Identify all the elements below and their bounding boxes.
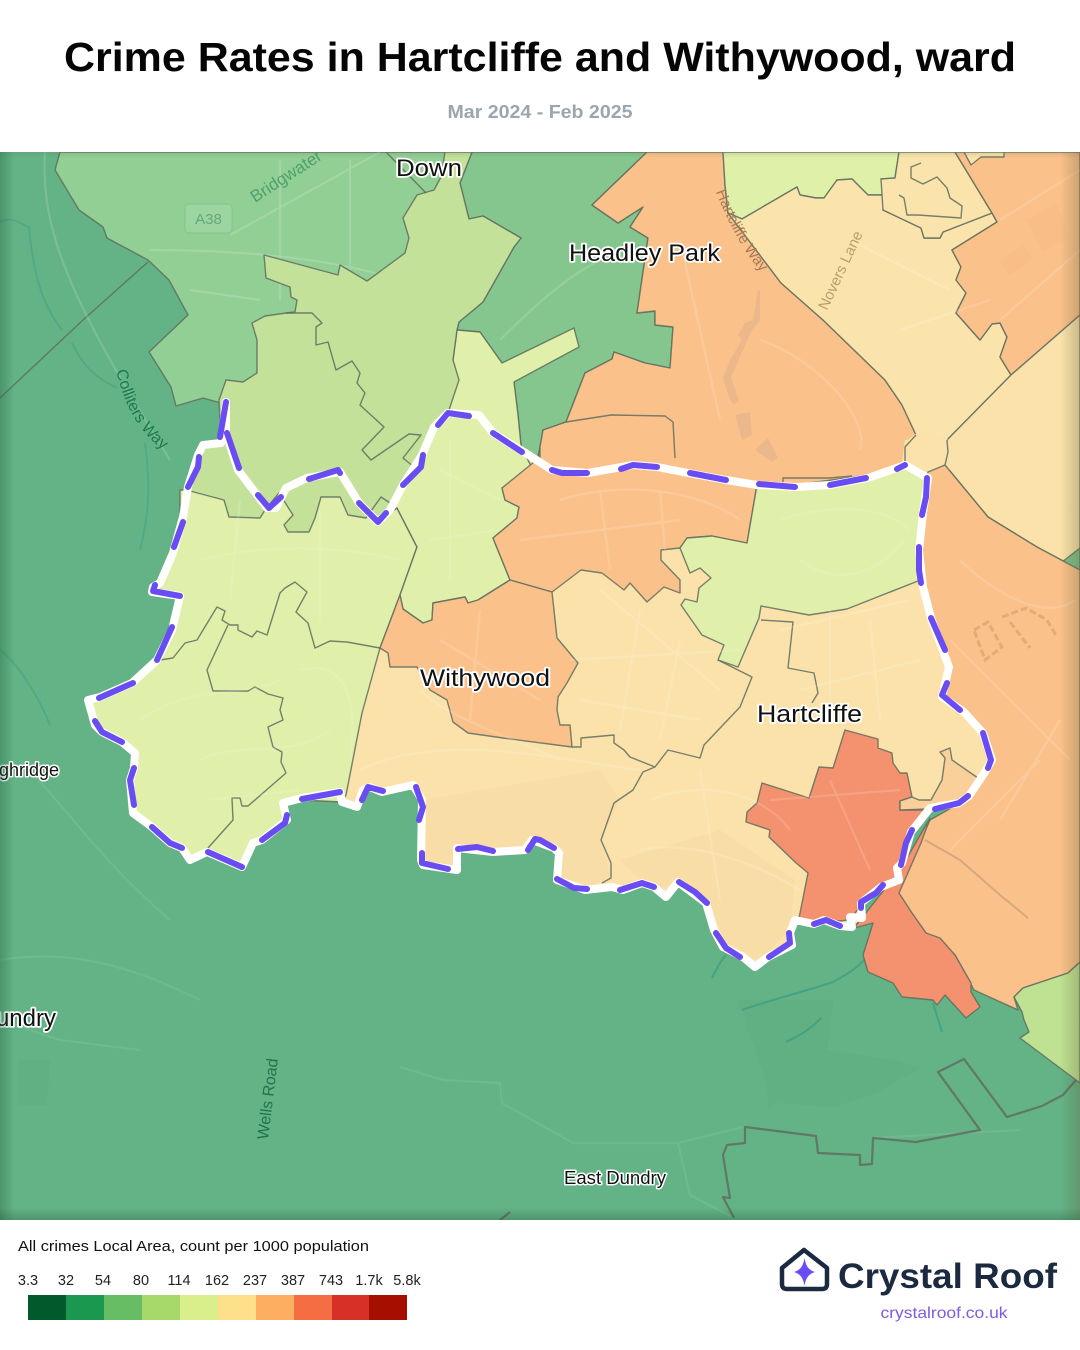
area: south-east light green bbox=[1014, 962, 1080, 1083]
faint rural roads bbox=[0, 760, 1020, 1218]
legend scale values: 32 bbox=[58, 1273, 74, 1289]
line: light green inner boundary bbox=[286, 313, 421, 467]
legend scale values: 54 bbox=[95, 1273, 111, 1289]
area: Headley Park green bbox=[457, 152, 673, 470]
logo wordmark: Crystal Roof bbox=[838, 1257, 1057, 1296]
area: south outer boundaries bbox=[500, 1059, 1076, 1220]
road label: Bridgwater: Bridgwater bbox=[247, 146, 326, 206]
line: north orange inner boundary bbox=[566, 415, 675, 458]
place label: Highridge fragment: ghridge bbox=[0, 760, 59, 780]
area: Novers Lane pale yellow bbox=[728, 179, 1011, 440]
area: Hartcliffe salmon bbox=[746, 730, 930, 923]
line: lime notch above ward bbox=[783, 476, 852, 485]
legend scale values: 237 bbox=[243, 1273, 267, 1289]
legend scale values: 3.3 bbox=[18, 1273, 38, 1289]
area: light green backing along ward bbox=[372, 497, 389, 516]
place label: Withywood: Withywood bbox=[420, 665, 550, 692]
map edge shading bbox=[0, 152, 1080, 1220]
place label: East Dundry: East Dundry bbox=[564, 1168, 666, 1188]
area: north-east orange bbox=[952, 152, 1080, 375]
area: ward base pale yellow bbox=[345, 459, 988, 962]
area: south ward shading bbox=[424, 770, 620, 885]
line: roundabout edges bbox=[904, 434, 949, 466]
streams: west bbox=[0, 220, 148, 725]
road label: Wells Road: Wells Road bbox=[255, 1058, 282, 1140]
streets: residential network bbox=[140, 170, 1080, 900]
icon: house with star bbox=[782, 1250, 827, 1289]
legend title: All crimes Local Area, count per 1000 population bbox=[18, 1239, 369, 1255]
road label: Colliters Way: Colliters Way bbox=[117, 370, 168, 449]
feature: ponds and stream bbox=[723, 290, 778, 462]
line: pocket inner boundary bbox=[899, 163, 962, 218]
choropleth map bbox=[0, 152, 1080, 1220]
legend bbox=[18, 1239, 421, 1320]
area: north orange bbox=[540, 152, 916, 490]
road shield: A38 bbox=[185, 204, 232, 233]
area: north pale lime bbox=[723, 152, 899, 219]
streams: south bbox=[712, 955, 942, 1042]
area: pocket pale yellow bbox=[881, 152, 992, 238]
legend scale values: 5.8k bbox=[393, 1273, 421, 1289]
area: central north lime bbox=[390, 413, 534, 623]
logo: Crystal Roof bbox=[782, 1250, 1057, 1322]
feature: east housing roads bbox=[974, 608, 1057, 660]
legend scale values: 387 bbox=[281, 1273, 305, 1289]
legend scale values: 80 bbox=[133, 1273, 149, 1289]
road shield: A38: A38 bbox=[195, 211, 222, 228]
area: south ward shading east bbox=[620, 830, 795, 960]
area: small green corner bbox=[1063, 548, 1080, 569]
area: small top pale shape bbox=[964, 152, 1004, 165]
ward boundary: white line bbox=[88, 402, 992, 967]
place label: Headley Park: Headley Park bbox=[569, 240, 721, 267]
legend scale values bbox=[18, 1273, 421, 1289]
area: light green north-centre bbox=[190, 152, 521, 532]
place label: Down: Down bbox=[396, 155, 462, 182]
area: roundabout bbox=[903, 434, 932, 453]
line: boundary north of Down bbox=[386, 152, 426, 193]
area: ward west lime bbox=[88, 470, 417, 867]
area: central orange bbox=[493, 462, 757, 602]
road: A38 bbox=[44, 152, 380, 460]
road label: Hartcliffe Way: Hartcliffe Way bbox=[716, 189, 768, 270]
woodland patches bbox=[18, 1000, 920, 1108]
area: east pale yellow triangle bbox=[945, 315, 1080, 570]
road label: Novers Lane: Novers Lane bbox=[815, 228, 867, 313]
subtitle: date range: Mar 2024 - Feb 2025 bbox=[448, 102, 632, 122]
legend scale values: 1.7k bbox=[355, 1273, 383, 1289]
area: east orange bbox=[897, 465, 1080, 1010]
patches: north-east orange shading bbox=[1000, 203, 1070, 275]
legend scale values: 114 bbox=[167, 1273, 191, 1289]
area: junction backing bbox=[902, 438, 950, 470]
area: small orange patch by east boundary bbox=[900, 748, 978, 810]
area: pale lime spur north of ward bbox=[448, 328, 579, 455]
area: south-east salmon bbox=[854, 818, 980, 1018]
legend scale values: 162 bbox=[205, 1273, 229, 1289]
area: medium green north-west bbox=[55, 152, 480, 406]
website link: crystalroof.co.uk bbox=[880, 1305, 1009, 1322]
place label: Hartcliffe: Hartcliffe bbox=[757, 701, 862, 728]
legend colour swatches bbox=[28, 1295, 407, 1320]
title: Crime Rates in Hartcliffe and Withywood, ward bbox=[64, 34, 1016, 80]
area: central-east lime bbox=[680, 465, 928, 667]
area: Withywood orange bbox=[380, 580, 578, 747]
feature: east stream bbox=[925, 840, 1028, 918]
map area: rural green base bbox=[0, 152, 1080, 1220]
lines: ward internal boundaries bbox=[160, 582, 818, 883]
legend scale values: 743 bbox=[319, 1273, 343, 1289]
line: west rural boundary bbox=[0, 262, 148, 398]
ward boundary: purple dashes bbox=[95, 402, 991, 957]
